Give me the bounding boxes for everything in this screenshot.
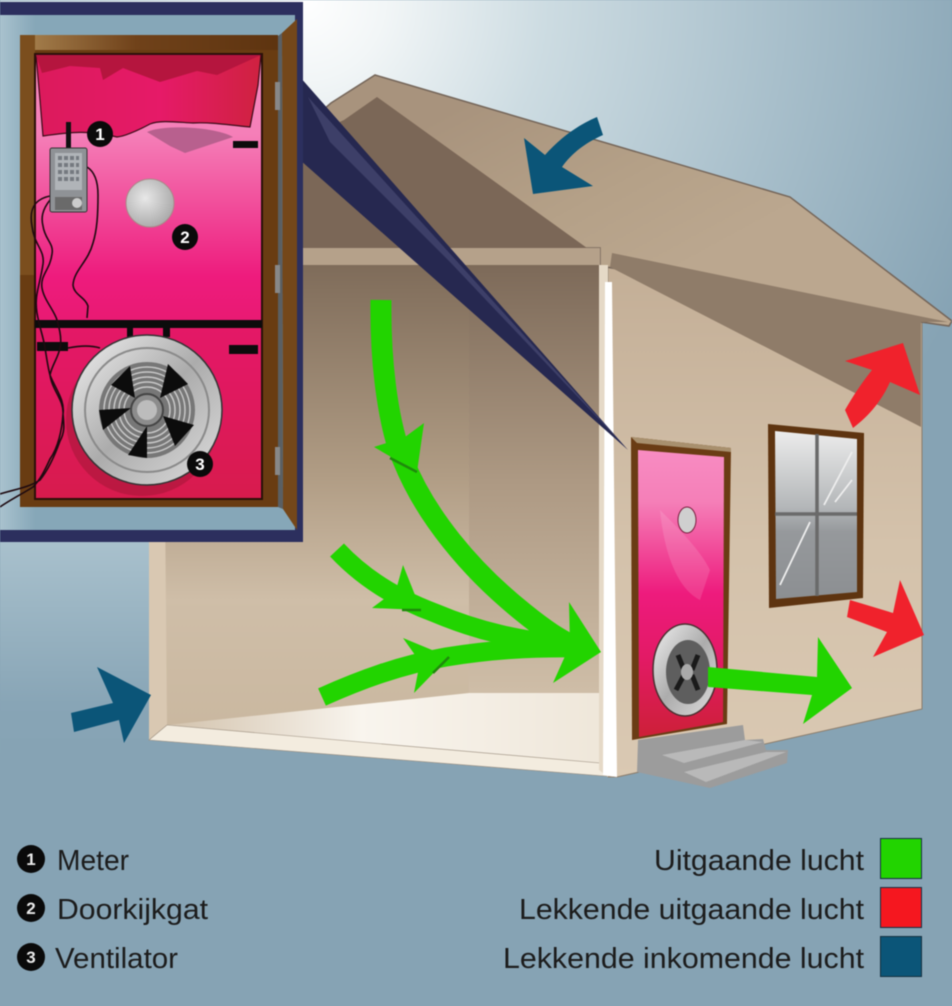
door frame xyxy=(20,35,278,507)
legend: numbered items: Doorkijkgat xyxy=(57,894,208,926)
badge 2 xyxy=(172,224,198,250)
legend: numbered items: Meter xyxy=(57,845,129,877)
red arrow: bottom xyxy=(847,580,924,657)
house xyxy=(149,75,952,777)
flap dark band xyxy=(36,55,261,82)
corner white strip xyxy=(603,282,617,777)
badge 1: 1 xyxy=(95,125,105,144)
inset panel xyxy=(0,2,303,542)
left interior wall xyxy=(149,265,471,735)
door fabric xyxy=(35,54,262,499)
small door xyxy=(631,437,731,740)
arrowhead crease lines xyxy=(390,458,449,673)
handles and bar xyxy=(35,141,262,354)
icon: peephole xyxy=(126,179,174,227)
legend: numbered items: 1 xyxy=(26,850,36,869)
icon: meter xyxy=(50,122,87,212)
cables xyxy=(0,167,100,507)
legend: arrow colours xyxy=(503,838,922,976)
top flap xyxy=(36,55,261,137)
steps xyxy=(637,725,788,788)
lower panel tint xyxy=(36,328,261,498)
legend: arrow colours: Lekkende uitgaande lucht xyxy=(519,894,864,926)
hinges xyxy=(275,82,280,475)
legend: numbered items: Ventilator xyxy=(55,943,178,975)
blue arrow: left xyxy=(71,667,151,743)
badge 3 xyxy=(187,451,213,477)
legend: arrow colours: Uitgaande lucht xyxy=(654,845,864,877)
corner post xyxy=(599,265,608,777)
open door leaf xyxy=(282,19,297,530)
green arrowheads xyxy=(372,423,601,693)
legend: numbered items xyxy=(17,845,208,975)
left cut edge xyxy=(149,500,167,740)
green arrow: through fan xyxy=(708,637,852,724)
right exterior wall xyxy=(608,255,922,777)
legend: numbered items: 3 xyxy=(26,948,36,967)
green arrow: main curved xyxy=(381,300,578,648)
badge 3: 3 xyxy=(195,455,205,474)
green arrow: upper left xyxy=(337,550,565,645)
back interior wall xyxy=(469,265,600,695)
badge 1 xyxy=(87,121,113,147)
legend: numbered items: 2 xyxy=(26,899,36,918)
red arrow: top xyxy=(845,343,920,428)
window xyxy=(768,424,864,608)
icon: fan xyxy=(66,335,222,496)
floor xyxy=(167,693,600,765)
front cut edge xyxy=(149,725,617,777)
flap shadow xyxy=(147,127,233,153)
eave shadow on right wall xyxy=(610,253,948,427)
legend: arrow colours: Lekkende inkomende lucht xyxy=(503,943,864,975)
green arrow: lower left xyxy=(322,648,580,697)
attic space xyxy=(300,97,587,248)
badge 2: 2 xyxy=(180,228,190,247)
roof xyxy=(300,75,952,326)
blue arrow: roof xyxy=(524,117,603,194)
callout wedge to door xyxy=(300,77,628,450)
attic floor beam xyxy=(300,248,600,265)
